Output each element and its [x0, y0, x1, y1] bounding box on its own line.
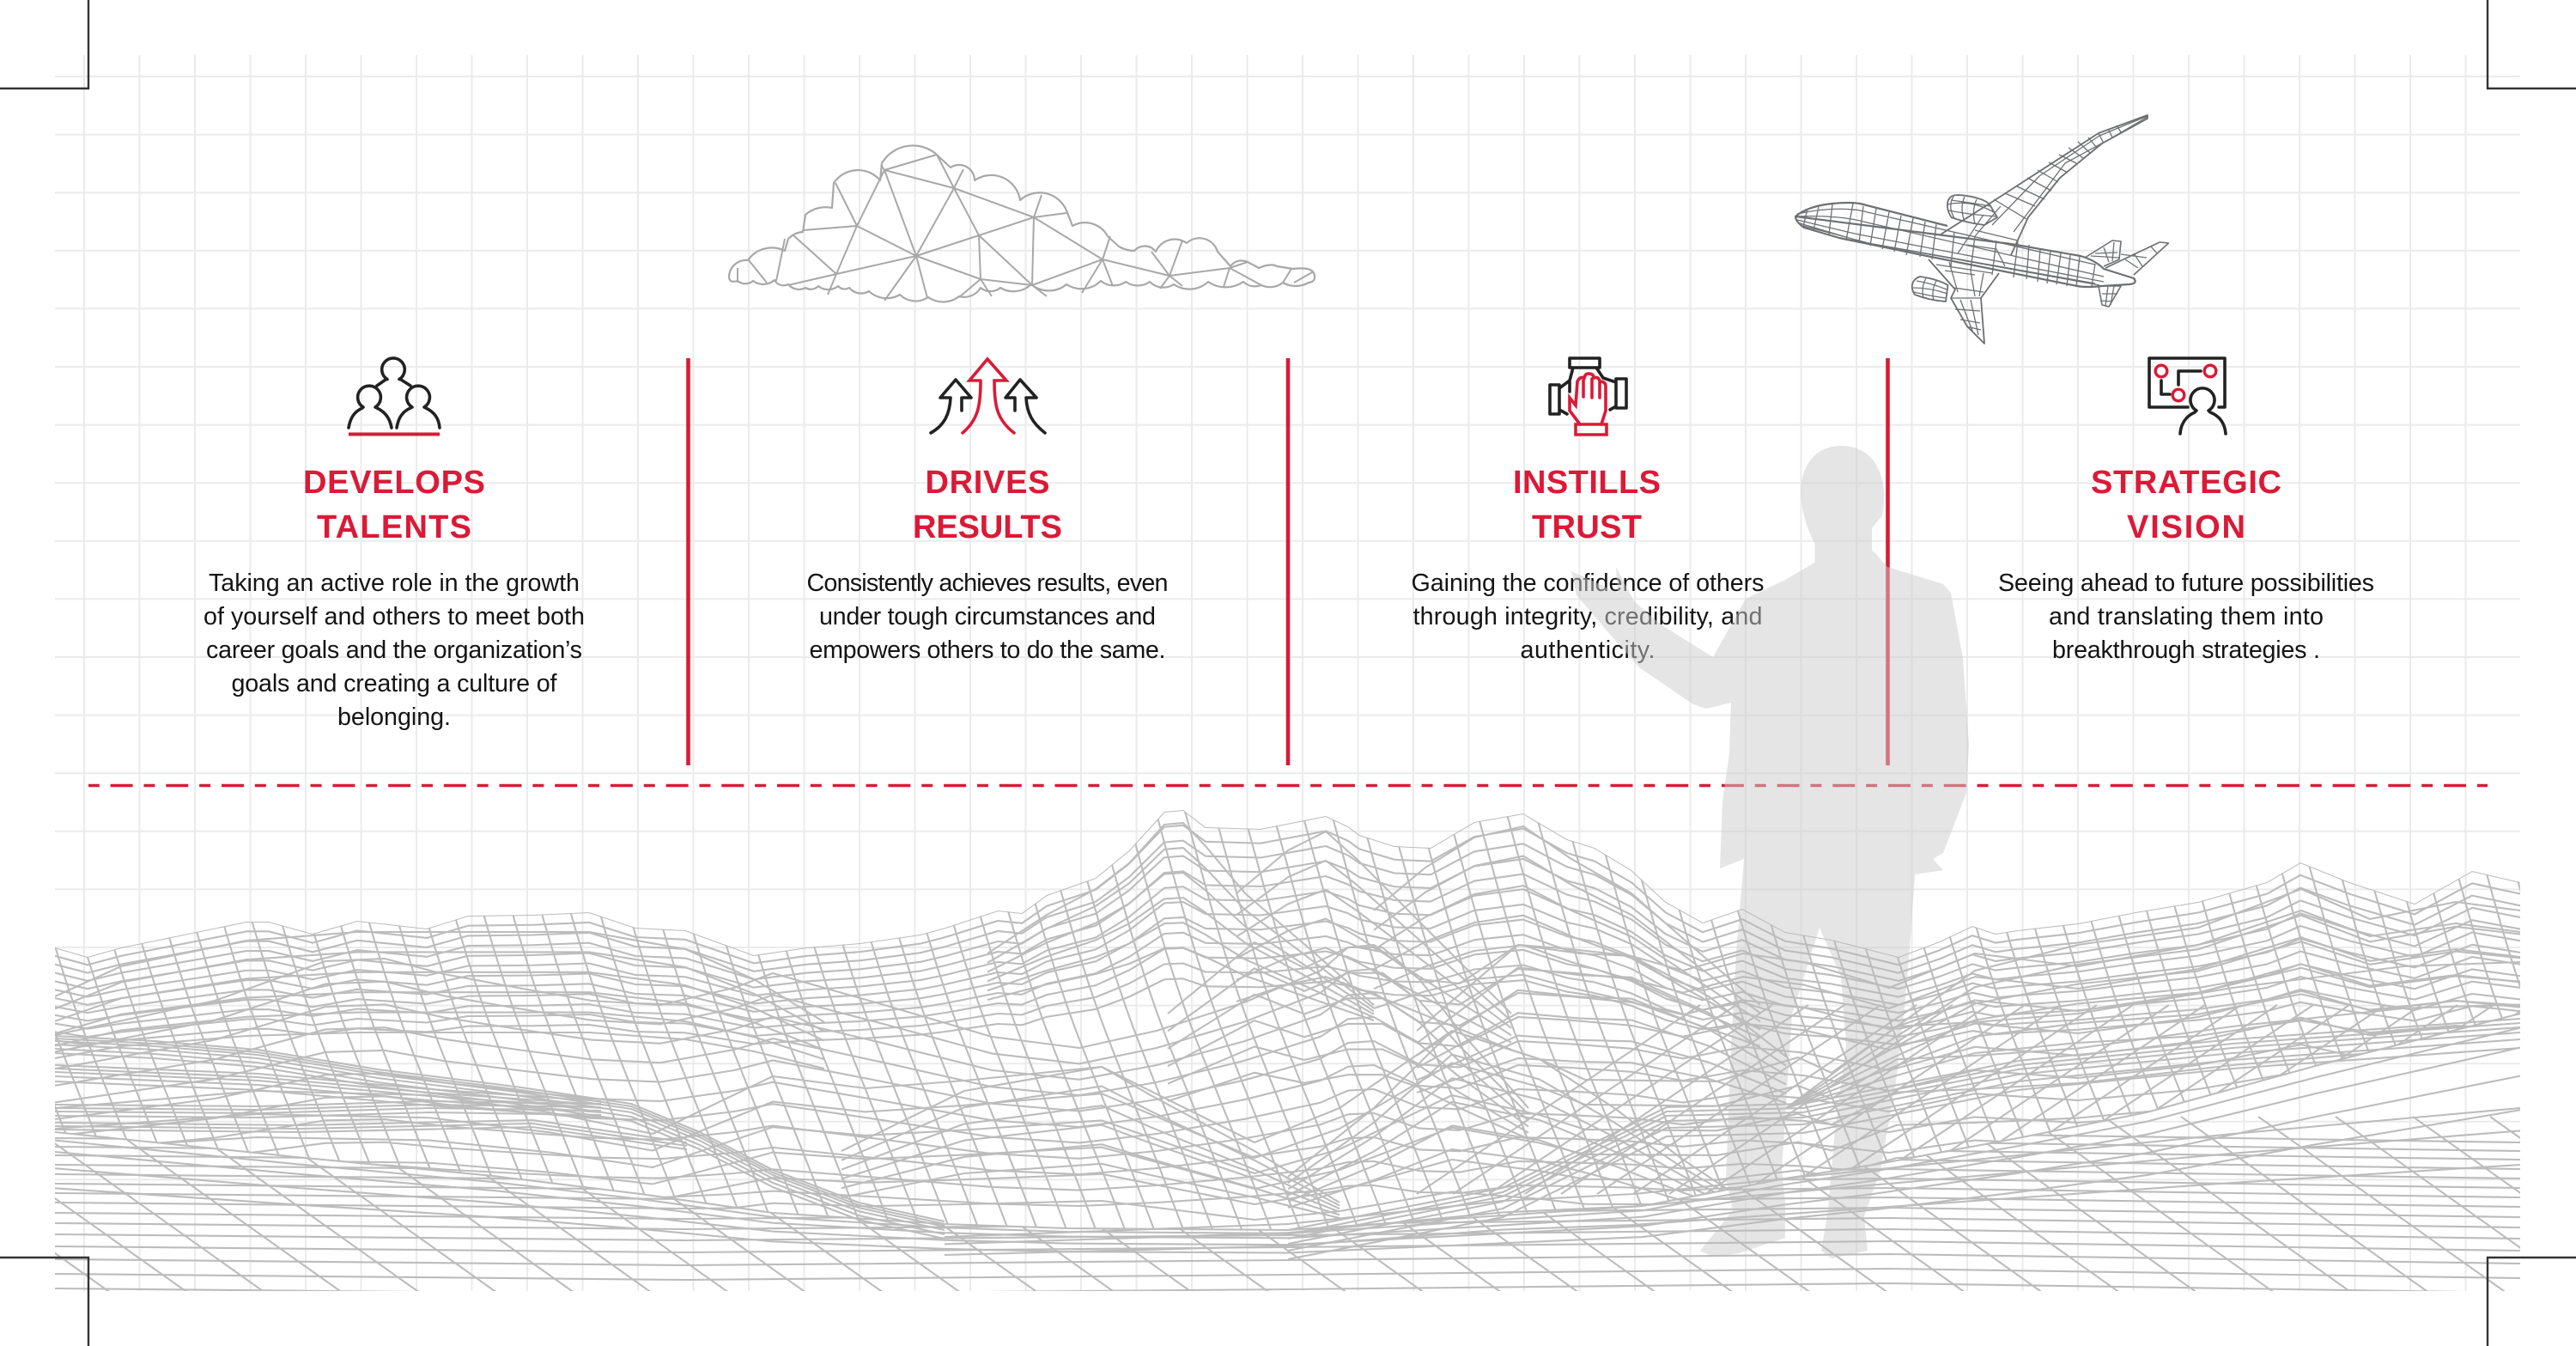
icon: three people [349, 358, 440, 435]
terrain: foreground plain [0, 1014, 2576, 1306]
panel: develops talents [204, 358, 585, 731]
text: instills trust description [1412, 569, 1764, 664]
heading: drives results: RESULTS [913, 509, 1062, 545]
heading: develops talents: TALENTS [317, 509, 471, 545]
heading: strategic vision: VISION [2127, 509, 2245, 545]
cloud wireframe [729, 145, 1315, 302]
text: drives results description: under tough circumstances and [819, 603, 1156, 630]
panel: instills trust [1412, 358, 1764, 664]
panel: drives results [807, 359, 1168, 664]
icon: hands and trust [1550, 358, 1626, 435]
text: develops talents description: career goals and the organization’s [206, 636, 582, 664]
divider: red line two [1286, 358, 1290, 765]
text: develops talents description: Taking an active role in the growth [209, 569, 580, 597]
silhouette of businessman [1571, 446, 1969, 1258]
text: drives results description [807, 569, 1168, 664]
icon: person at strategy board [2149, 358, 2226, 434]
heading: develops talents [303, 465, 485, 545]
divider: red line three [1886, 358, 1890, 765]
text: instills trust description: through integrity, credibility, and [1413, 603, 1762, 630]
heading: develops talents: DEVELOPS [303, 465, 485, 501]
panel: strategic vision [1998, 358, 2374, 664]
text: develops talents description [204, 569, 585, 731]
text: drives results description: empowers others to do the same. [809, 636, 1166, 664]
heading: strategic vision [2091, 465, 2281, 545]
text: develops talents description: of yourself and others to meet both [204, 603, 585, 630]
text: strategic vision description: Seeing ahead to future possibilities [1998, 569, 2374, 597]
text: instills trust description: Gaining the confidence of others [1412, 569, 1764, 597]
text: develops talents description: goals and creating a culture of [232, 670, 558, 697]
dashed horizon line [88, 784, 2488, 787]
text: instills trust description: authenticity. [1520, 636, 1656, 664]
text: develops talents description: belonging. [337, 703, 451, 731]
heading: drives results: DRIVES [926, 465, 1049, 501]
heading: drives results [913, 465, 1062, 545]
text: drives results description: Consistently achieves results, even [807, 569, 1168, 597]
terrain wireframe [0, 799, 2576, 1306]
heading: instills trust: TRUST [1532, 509, 1642, 545]
terrain: dense valley bands [55, 1019, 2520, 1259]
text: strategic vision description: and translating them into [2049, 603, 2324, 630]
text: strategic vision description [1998, 569, 2374, 664]
icon: rising arrows [931, 359, 1045, 433]
heading: strategic vision: STRATEGIC [2091, 465, 2281, 501]
airplane wireframe [1795, 115, 2169, 344]
text: strategic vision description: breakthrough strategies . [2052, 636, 2320, 664]
terrain: mountains above the valley [55, 810, 2520, 1229]
heading: instills trust: INSTILLS [1513, 465, 1661, 501]
heading: instills trust [1513, 465, 1661, 545]
divider: red line one [686, 358, 690, 765]
